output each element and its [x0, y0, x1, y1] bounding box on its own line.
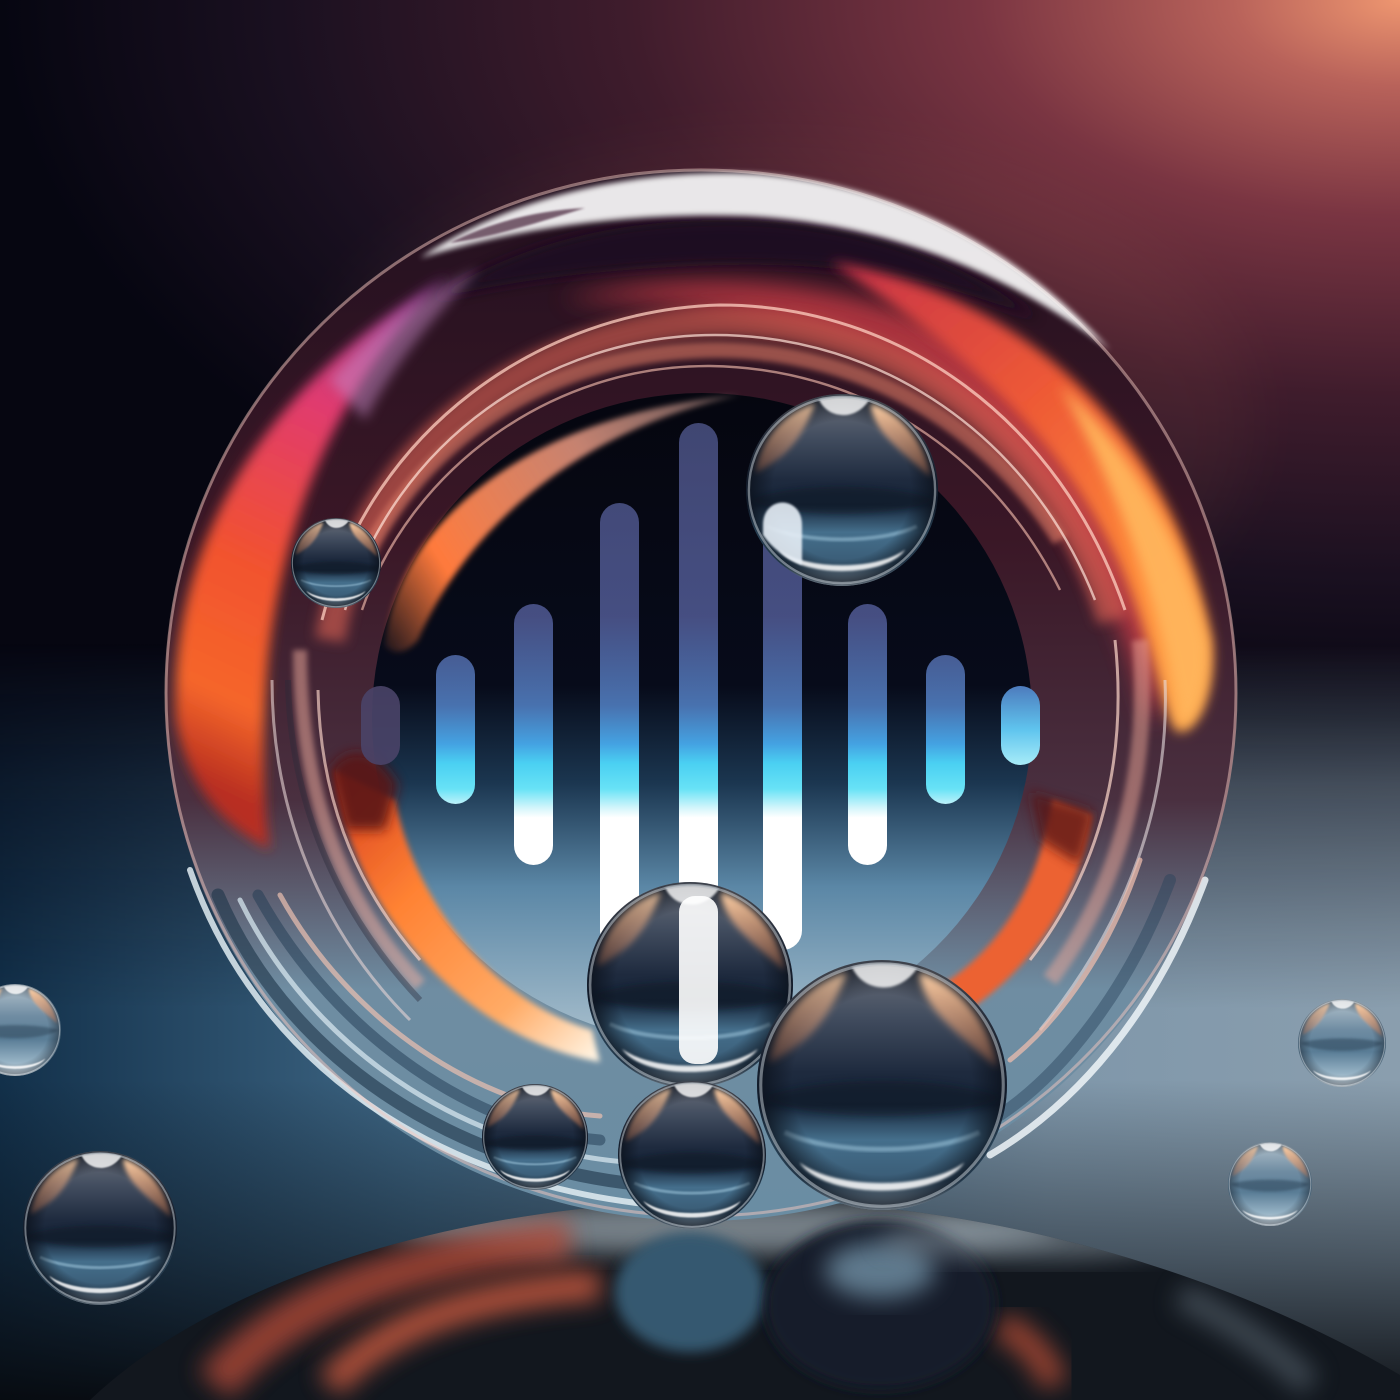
lower glass layers	[190, 860, 1205, 1208]
droplet: floor right upper	[1298, 999, 1386, 1087]
droplet: floor left edge	[0, 984, 61, 1076]
bar 6	[763, 503, 802, 950]
bar 2	[436, 655, 475, 804]
ring halo	[310, 140, 1250, 700]
bar 4	[600, 503, 639, 950]
reflective dome with ring reflection	[90, 1200, 1400, 1400]
ring body	[165, 169, 1237, 1221]
bar 1	[361, 686, 400, 765]
bar seen through upper droplet	[763, 502, 802, 565]
droplet: lower centre	[618, 1081, 766, 1229]
arc: right orange band	[830, 262, 1213, 732]
droplet: large lower right	[757, 960, 1007, 1210]
glass ring	[165, 169, 1237, 1221]
bar 3	[514, 604, 553, 865]
floor: blue grey surface	[0, 662, 1400, 1390]
bar 9	[1001, 686, 1040, 765]
arc: bottom right orange band	[942, 800, 1092, 1012]
bar 8	[926, 655, 965, 804]
arc: left red pink band	[175, 275, 450, 850]
sound wave bars	[361, 423, 1040, 1065]
top inner dark band	[430, 220, 1040, 320]
arc: inner top orange curve	[385, 395, 740, 652]
droplet: centre	[587, 882, 793, 1088]
left lilac reflection	[330, 268, 480, 420]
ring outer rim	[166, 170, 1236, 1216]
droplet: upper left on ring	[291, 518, 381, 608]
droplet: floor right lower	[1228, 1142, 1312, 1226]
droplet: lower left	[482, 1084, 588, 1190]
droplet: floor far left	[23, 1151, 177, 1305]
droplet: upper right on ring	[746, 394, 938, 586]
bar seen through centre droplet	[679, 896, 718, 1064]
bar 7	[848, 604, 887, 865]
top white highlight	[420, 173, 1110, 350]
arc: lower right dark red accent	[1030, 790, 1095, 865]
arc: coral glow under the top of the ring	[560, 282, 1164, 720]
swirl strokes	[272, 305, 1165, 1030]
arc: left dark red accent	[330, 753, 398, 830]
ring hole	[372, 393, 1032, 1043]
bar 5	[679, 423, 718, 1065]
top highlight dark streak	[450, 208, 585, 243]
arc: bottom left orange band	[335, 770, 600, 1062]
arc: inner bright orange highlight	[1060, 385, 1208, 728]
